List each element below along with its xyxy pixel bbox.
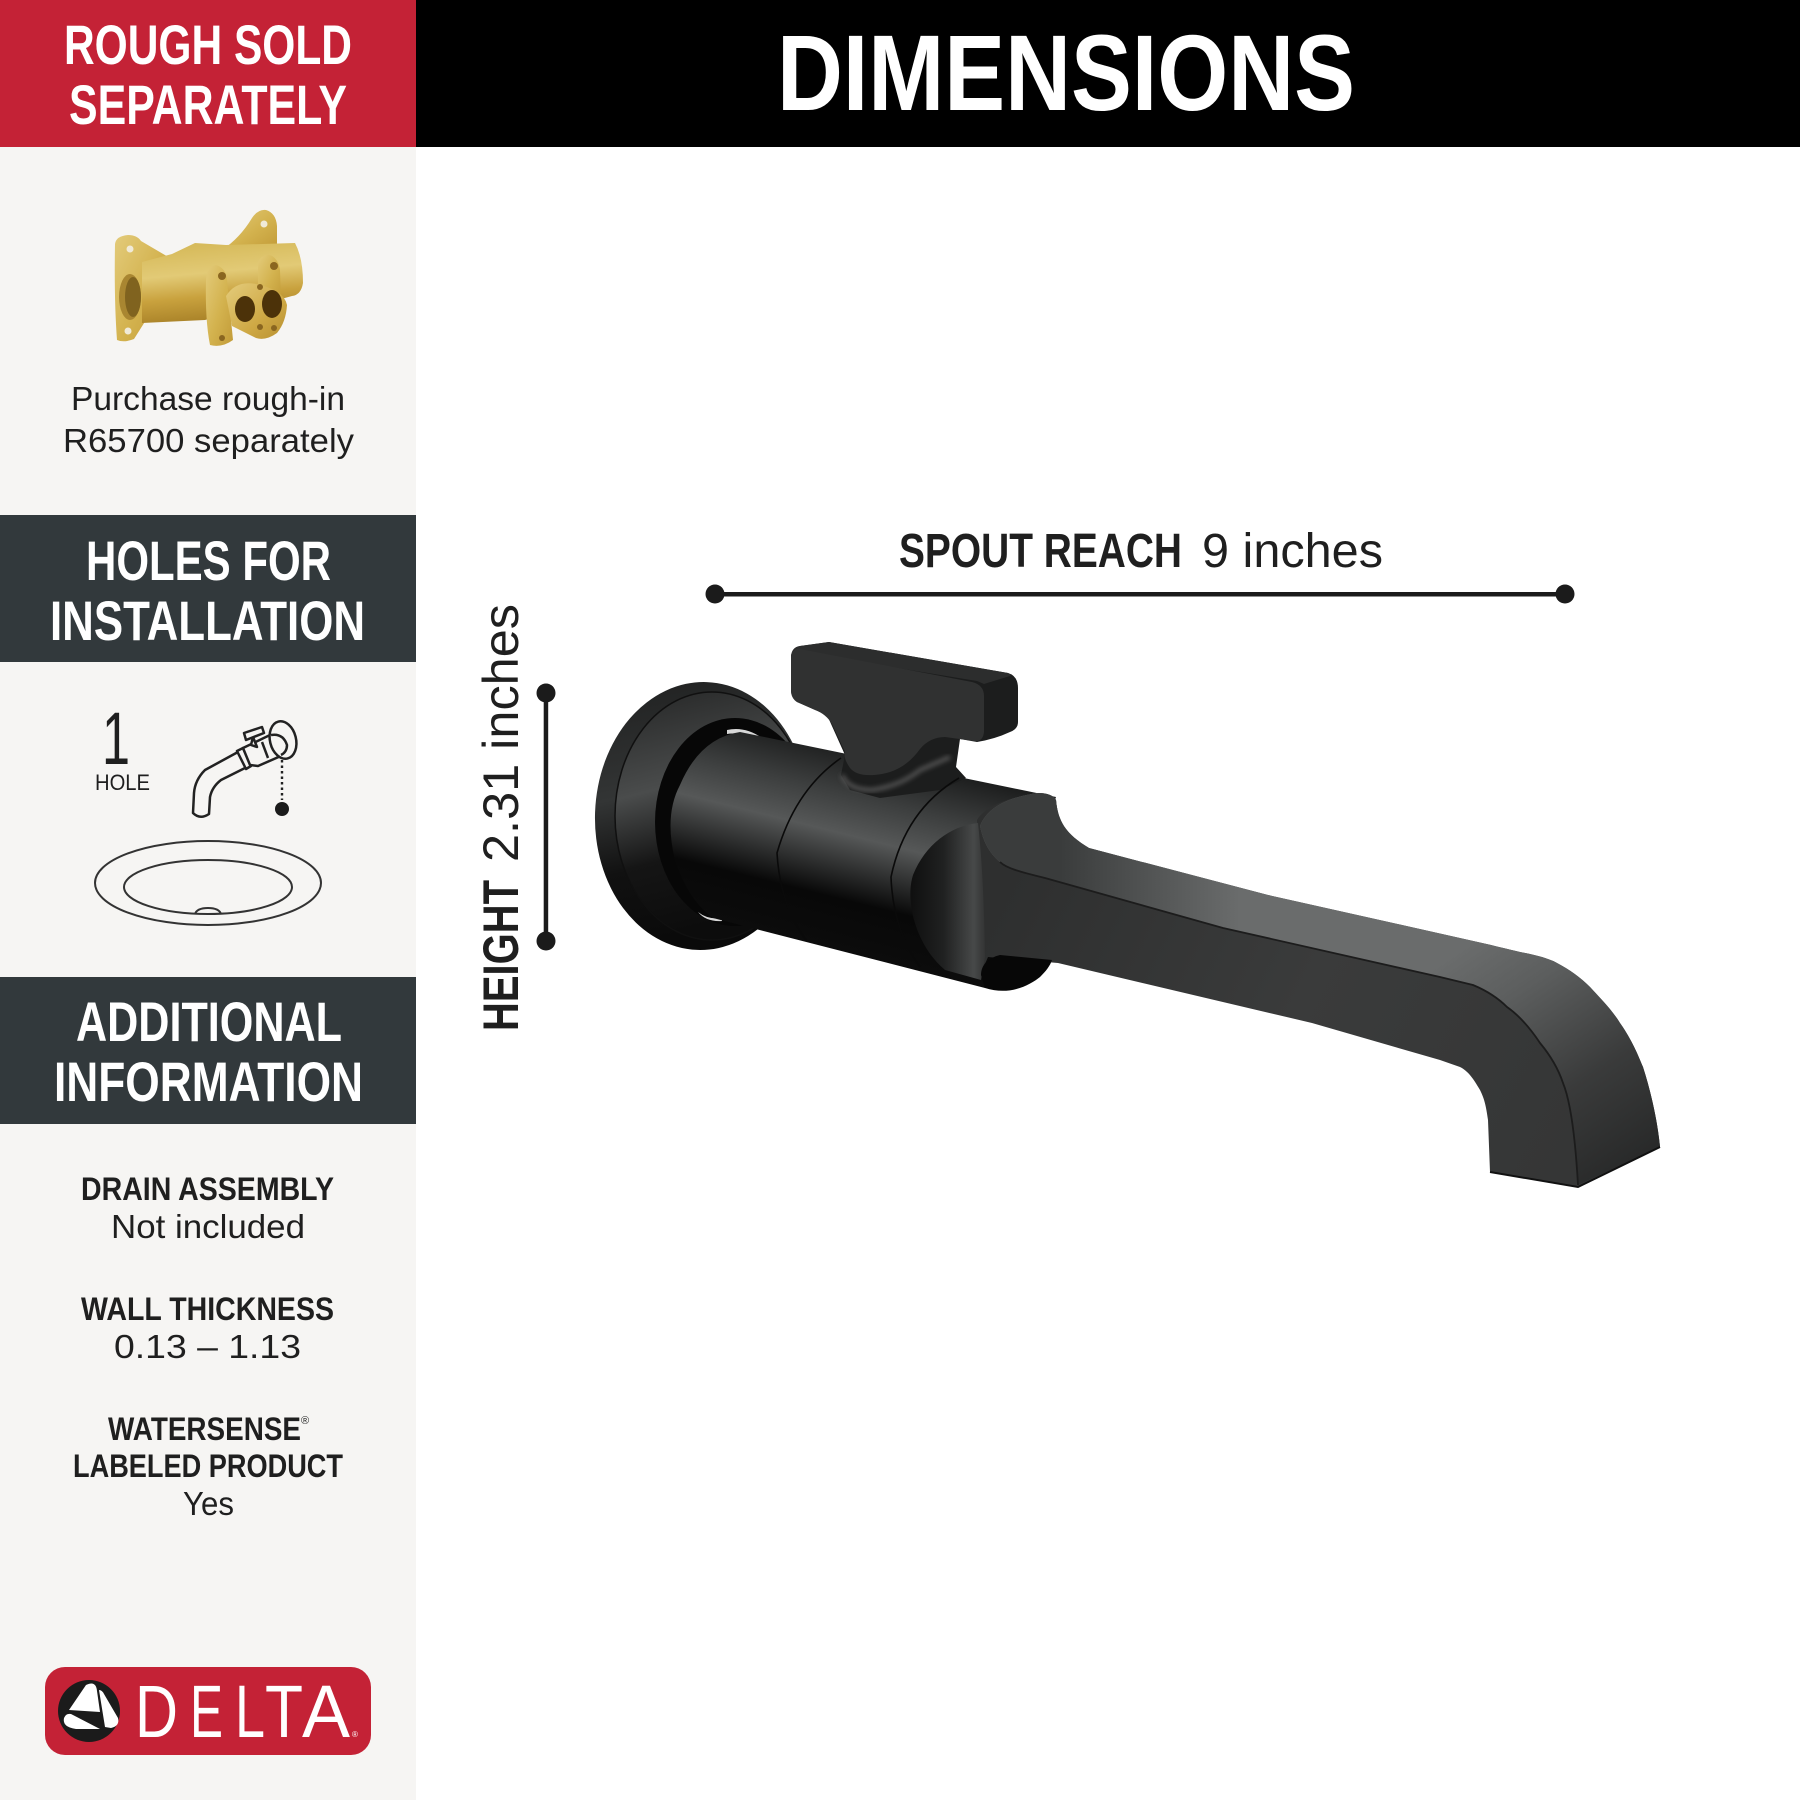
barrel (671, 732, 1056, 988)
front face with ports (226, 283, 287, 339)
heading: additional information: INFORMATION (54, 1050, 363, 1113)
info: drain assembly (81, 1171, 334, 1245)
info: wall thickness: WALL THICKNESS (81, 1291, 334, 1327)
logo: delta: A (302, 1670, 351, 1753)
title banner: dimensions: DIMENSIONS (777, 12, 1355, 133)
flange (590, 678, 815, 954)
label: spout reach: SPOUT REACH (899, 525, 1182, 578)
left mounting plate (115, 235, 170, 341)
info: wall thickness: 0.13 – 1.13 (114, 1328, 301, 1365)
logo: delta: ® (352, 1730, 358, 1739)
info: watersense labeled product (73, 1411, 343, 1522)
label: height: 2.31 inches (473, 604, 529, 862)
text: purchase rough-in: R65700 separately (63, 422, 355, 459)
info: watersense labeled product: ® (301, 1415, 309, 1427)
banner: rough sold separately: ROUGH SOLD (64, 13, 352, 76)
rear bracket (258, 255, 281, 300)
text: purchase rough-in (63, 380, 355, 459)
info: drain assembly: DRAIN ASSEMBLY (81, 1171, 334, 1207)
threaded port (119, 274, 141, 320)
logo: delta (45, 1667, 371, 1755)
heading: additional information: ADDITIONAL (76, 990, 342, 1053)
info: watersense labeled product: WATERSENSE (108, 1411, 301, 1447)
label: height (473, 604, 529, 1031)
icon: sink basin (95, 841, 321, 925)
label: height: HEIGHT (473, 880, 529, 1031)
seams (777, 758, 959, 967)
heading: holes for installation: INSTALLATION (50, 589, 365, 652)
info: watersense labeled product: LABELED PRODUCT (73, 1448, 343, 1484)
info: watersense labeled product: Yes (183, 1485, 234, 1522)
icon: one hole count (95, 697, 150, 795)
dimension line: height (536, 684, 556, 950)
info: wall thickness (81, 1291, 334, 1365)
banner: rough sold separately (0, 0, 416, 147)
logo: delta: D (135, 1670, 178, 1753)
title banner: dimensions (416, 0, 1800, 147)
text: purchase rough-in: Purchase rough-in (71, 380, 345, 417)
heading: holes for installation (0, 515, 416, 662)
icon: one hole count: 1 (102, 697, 130, 780)
label: spout reach: 9 inches (1202, 525, 1383, 578)
right mounting flange (222, 210, 277, 250)
logo: delta: E (190, 1670, 223, 1753)
spout (910, 793, 1660, 1187)
handle (791, 642, 1018, 798)
logo: delta: T (265, 1670, 303, 1753)
image: brass rough-in valve (115, 210, 303, 346)
heading: holes for installation: HOLES FOR (86, 529, 331, 592)
sidebar background (0, 147, 416, 1800)
banner: rough sold separately: SEPARATELY (69, 73, 347, 136)
front bracket (206, 265, 233, 346)
info: drain assembly: Not included (111, 1208, 305, 1245)
heading: additional information (0, 977, 416, 1124)
dimension line: spout reach (706, 584, 1574, 604)
image: matte black wall-mount faucet (590, 642, 1660, 1187)
icon: one hole count: HOLE (95, 770, 150, 795)
cylinder body (142, 243, 303, 323)
icon: faucet line drawing with hole marker (193, 718, 300, 817)
logo: delta: L (235, 1670, 265, 1753)
